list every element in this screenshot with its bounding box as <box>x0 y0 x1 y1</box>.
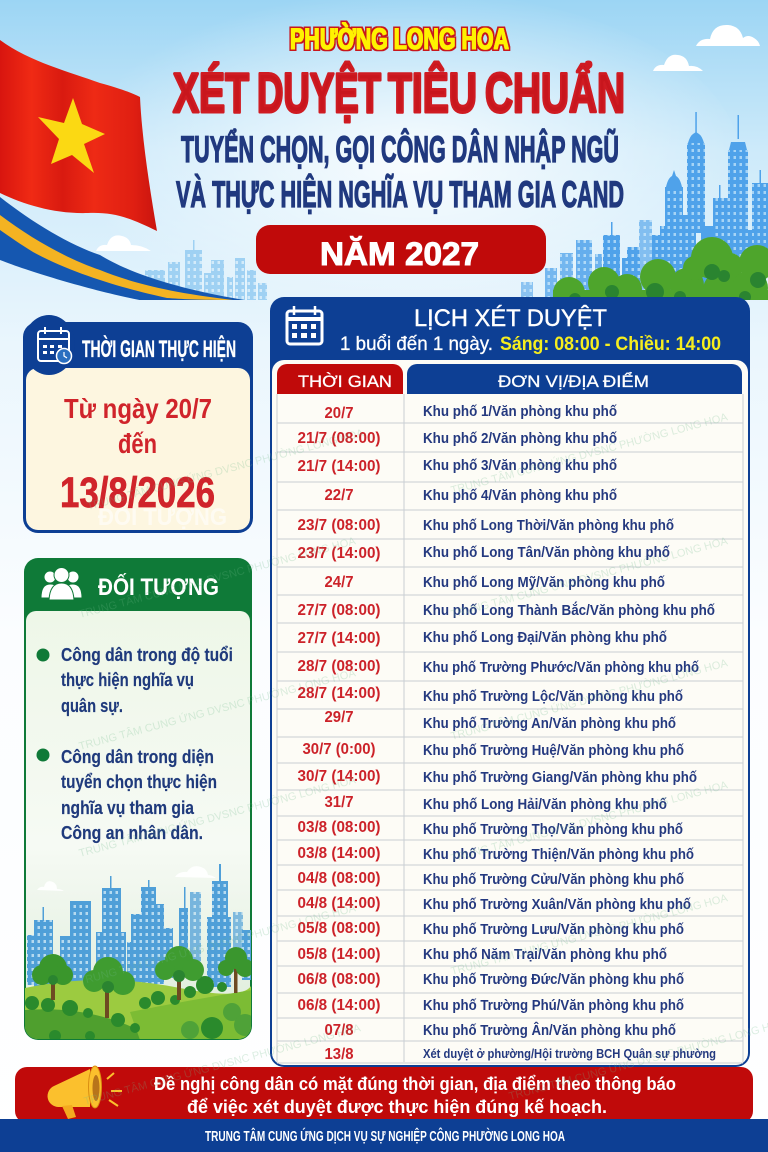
row 07/8: 07/8 <box>324 1022 354 1039</box>
row 13/8: 13/8 <box>324 1046 354 1063</box>
watermarks: TRUNG TÂM CUNG ỨNG DVSNC PHƯỜNG LONG HOA <box>77 773 358 860</box>
row 04/8 afternoon <box>298 895 691 913</box>
bullet 1: Công dân trong độ tuổi <box>61 645 233 665</box>
row 28/7 morning: Khu phố Trường Phước/Văn phòng khu phố <box>423 660 699 676</box>
row 28/7 afternoon: Khu phố Trường Lộc/Văn phòng khu phố <box>423 689 683 705</box>
trees: right <box>553 237 768 300</box>
watermarks: TRUNG TÂM CUNG ỨNG DVSNC PHƯỜNG LONG HOA <box>449 656 730 743</box>
icon: people <box>41 568 82 600</box>
main title <box>173 61 625 124</box>
row 30/7 afternoon: 30/7 (14:00) <box>298 768 380 785</box>
main title: CHUẨN <box>485 61 625 124</box>
row 31/7: Khu phố Long Hải/Văn phòng khu phố <box>423 797 667 813</box>
row 03/8 morning: Khu phố Trường Thọ/Văn phòng khu phố <box>423 822 683 838</box>
row 28/7 afternoon: 28/7 (14:00) <box>298 685 380 702</box>
ribbon swoosh <box>0 197 250 303</box>
year pill: NĂM 2027 <box>320 236 479 272</box>
row 03/8 morning: 03/8 (08:00) <box>298 819 380 836</box>
illustration: city park <box>25 864 256 1042</box>
row 06/8 morning: 06/8 (08:00) <box>298 971 380 988</box>
row 03/8 afternoon <box>298 845 694 863</box>
row 21/7 morning: 21/7 (08:00) <box>298 430 380 447</box>
ghost text: ĐỐI TƯỢNG <box>98 503 227 531</box>
heading: LỊCH XÉT DUYỆT <box>414 305 607 332</box>
heading: ĐỐI TƯỢNG <box>98 573 219 601</box>
flag star <box>38 98 105 173</box>
row 06/8 afternoon <box>298 997 684 1014</box>
row 21/7 afternoon <box>298 458 617 475</box>
date from: Từ ngày 20/7 <box>64 393 212 424</box>
row 23/7 afternoon: Khu phố Long Tân/Văn phòng khu phố <box>423 545 670 561</box>
notice line 2: để việc xét duyệt được thực hiện đúng kế hoạch. <box>187 1097 607 1117</box>
row 03/8 afternoon: Khu phố Trường Thiện/Văn phòng khu phố <box>423 847 694 863</box>
row 30/7 afternoon: Khu phố Trường Giang/Văn phòng khu phố <box>423 770 697 786</box>
row 05/8 afternoon <box>298 946 667 963</box>
row 27/7 morning <box>298 601 715 619</box>
row 22/7: 22/7 <box>324 487 354 504</box>
main title: DUYỆT <box>257 61 381 124</box>
row 23/7 morning <box>298 517 674 534</box>
row 27/7 morning: 27/7 (08:00) <box>298 602 380 619</box>
icon: megaphone <box>48 1066 122 1119</box>
footer <box>0 1119 768 1152</box>
row 27/7 afternoon: 27/7 (14:00) <box>298 630 380 647</box>
row 20/7: 20/7 <box>324 405 354 422</box>
title block <box>173 22 625 215</box>
row 27/7 afternoon: Khu phố Long Đại/Văn phòng khu phố <box>423 630 667 646</box>
row 05/8 morning: 05/8 (08:00) <box>298 920 380 937</box>
panel: target group <box>24 558 256 1042</box>
table head: time: THỜI GIAN <box>298 372 392 391</box>
row 21/7 afternoon: Khu phố 3/Văn phòng khu phố <box>423 458 617 474</box>
bullet 2: Công dân trong diện <box>61 747 214 767</box>
icon: calendar <box>287 306 322 344</box>
row 05/8 morning: Khu phố Trường Lưu/Văn phòng khu phố <box>423 922 684 938</box>
row 04/8 morning <box>298 870 684 888</box>
row 27/7 afternoon <box>298 630 667 647</box>
table head: place <box>407 364 742 394</box>
watermarks: TRUNG TÂM CUNG ỨNG DVSNC PHƯỜNG LONG HOA <box>82 1021 363 1108</box>
ward name: PHƯỜNG LONG HOA <box>290 22 509 56</box>
row 06/8 afternoon: Khu phố Trường Phú/Văn phòng khu phố <box>423 998 684 1014</box>
row 13/8: Xét duyệt ở phường/Hội trường BCH Quân sự phường <box>423 1046 716 1061</box>
panel: schedule <box>270 297 750 1067</box>
row 03/8 morning <box>298 819 683 838</box>
row 30/7 morning <box>302 741 684 759</box>
row 22/7: Khu phố 4/Văn phòng khu phố <box>423 488 617 504</box>
main title: XÉT <box>173 61 249 124</box>
footer: TRUNG TÂM CUNG ỨNG DỊCH VỤ SỰ NGHIỆP CÔNG PHƯỜNG LONG HOA <box>205 1127 565 1145</box>
row 29/7: Khu phố Trường An/Văn phòng khu phố <box>423 716 676 732</box>
watermarks: TRUNG TÂM CUNG ỨNG DVSNC PHƯỜNG LONG HOA <box>449 534 730 621</box>
bullet 2: nghĩa vụ tham gia <box>61 798 195 818</box>
heading: THỜI GIAN THỰC HIỆN <box>82 335 236 363</box>
row 06/8 morning <box>298 971 684 988</box>
watermarks: TRUNG TÂM CUNG ỨNG DVSNC PHƯỜNG LONG HOA <box>77 666 358 753</box>
bullet 2: tuyển chọn thực hiện <box>61 772 217 792</box>
row 23/7 afternoon: 23/7 (14:00) <box>298 545 380 562</box>
row 28/7 morning <box>298 658 699 676</box>
bullet 2 <box>36 747 217 843</box>
watermarks: TRUNG TÂM CUNG ỨNG DVSNC PHƯỜNG LONG HOA <box>449 778 730 865</box>
watermarks: TRUNG TÂM CUNG ỨNG DVSNC PHƯỜNG LONG HOA <box>77 901 358 988</box>
watermarks: TRUNG TÂM CUNG ỨNG DVSNC PHƯỜNG LONG HOA <box>449 891 730 978</box>
table head: time <box>277 364 403 394</box>
bullet 2: Công an nhân dân. <box>61 823 203 843</box>
row 31/7 <box>324 794 667 813</box>
bullet 1: thực hiện nghĩa vụ <box>61 670 194 690</box>
skyline: small left <box>145 240 267 300</box>
row 04/8 morning: 04/8 (08:00) <box>298 870 380 887</box>
row 20/7 <box>324 404 617 422</box>
row 29/7: 29/7 <box>324 709 354 726</box>
table head: place: ĐƠN VỊ/ĐỊA ĐIỂM <box>498 372 649 391</box>
watermarks: TRUNG TÂM CUNG ỨNG DVSNC PHƯỜNG LONG HOA <box>85 426 366 513</box>
row 30/7 afternoon <box>298 768 697 786</box>
row 04/8 morning: Khu phố Trường Cửu/Văn phòng khu phố <box>423 872 684 888</box>
row 24/7 <box>324 574 665 591</box>
row 27/7 morning: Khu phố Long Thành Bắc/Văn phòng khu phố <box>423 601 715 619</box>
row 04/8 afternoon: Khu phố Trường Xuân/Văn phòng khu phố <box>423 897 691 913</box>
panel: implementation time <box>23 315 253 533</box>
row 24/7: 24/7 <box>324 574 354 591</box>
date to: 13/8/2026 <box>60 469 215 517</box>
row 04/8 afternoon: 04/8 (14:00) <box>298 895 380 912</box>
row 07/8: Khu phố Trường Ân/Văn phòng khu phố <box>423 1021 676 1039</box>
flag of Vietnam <box>0 40 157 231</box>
subheading: 1 buổi đến 1 ngày. <box>340 333 493 355</box>
row 28/7 afternoon <box>298 685 683 705</box>
main title: TIÊU <box>388 61 477 124</box>
row 21/7 morning <box>298 430 617 447</box>
row 06/8 morning: Khu phố Trường Đức/Văn phòng khu phố <box>423 972 684 988</box>
row 31/7: 31/7 <box>324 794 354 811</box>
row 22/7 <box>324 487 617 504</box>
row 07/8 <box>324 1021 676 1039</box>
row 13/8 <box>324 1046 716 1063</box>
notice line 1: Đề nghị công dân có mặt đúng thời gian, địa điểm theo thông báo <box>154 1074 676 1094</box>
row 29/7 <box>324 709 676 732</box>
row 20/7: Khu phố 1/Văn phòng khu phố <box>423 404 617 420</box>
row 28/7 morning: 28/7 (08:00) <box>298 658 380 675</box>
row 05/8 afternoon: Khu phố Năm Trại/Văn phòng khu phố <box>423 947 667 963</box>
row 21/7 morning: Khu phố 2/Văn phòng khu phố <box>423 431 617 447</box>
row 03/8 afternoon: 03/8 (14:00) <box>298 845 380 862</box>
session times: Sáng: 08:00 - Chiều: 14:00 <box>500 333 721 355</box>
row 05/8 morning <box>298 920 684 938</box>
bullet 1 <box>36 645 233 716</box>
row 23/7 afternoon <box>298 545 670 562</box>
notice banner <box>15 1066 753 1123</box>
watermarks: TRUNG TÂM CUNG ỨNG DVSNC PHƯỜNG LONG HOA <box>77 534 358 621</box>
skyline: right <box>521 112 768 300</box>
row 23/7 morning: Khu phố Long Thời/Văn phòng khu phố <box>423 518 674 534</box>
row 30/7 morning: Khu phố Trường Huệ/Văn phòng khu phố <box>423 743 684 759</box>
watermarks: TRUNG TÂM CUNG ỨNG DVSNC PHƯỜNG LONG HOA <box>449 410 730 497</box>
watermarks <box>77 410 768 1108</box>
row 23/7 morning: 23/7 (08:00) <box>298 517 380 534</box>
date connector: đến <box>118 428 157 459</box>
bullet 1: quân sự. <box>61 696 123 716</box>
row 06/8 afternoon: 06/8 (14:00) <box>298 997 380 1014</box>
row 30/7 morning: 30/7 (0:00) <box>302 741 376 758</box>
row 21/7 afternoon: 21/7 (14:00) <box>298 458 380 475</box>
year pill <box>256 225 546 274</box>
row 24/7: Khu phố Long Mỹ/Văn phòng khu phố <box>423 575 665 591</box>
row 05/8 afternoon: 05/8 (14:00) <box>298 946 380 963</box>
clouds <box>96 25 760 251</box>
icon: calendar clock <box>23 315 75 375</box>
